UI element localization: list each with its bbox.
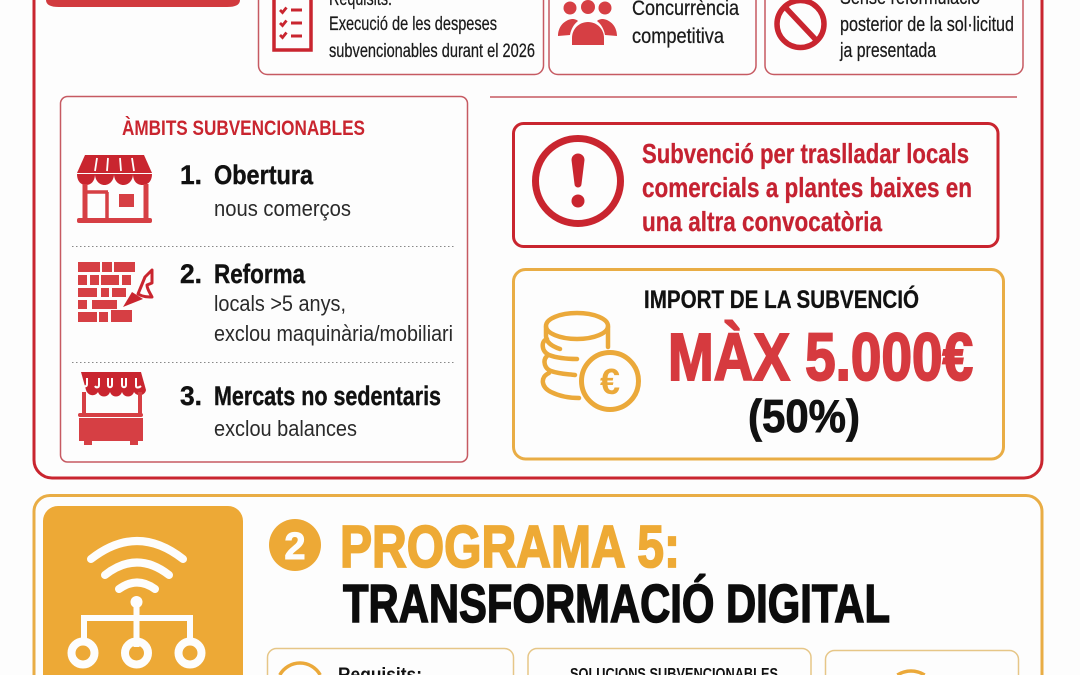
warning text: Subvenció per traslladar locals [642,138,969,169]
panel: third digital card [826,650,1018,675]
icon: euro coins [543,313,638,410]
item 3: non-sedentary markets: 3. [180,381,202,411]
item 2: renovation: Reforma [214,259,306,289]
panel: no reformulation card [765,0,1023,74]
icon: prohibited sign [777,0,824,48]
icon: shop [77,155,152,223]
item 2: renovation: locals >5 anys, [214,291,346,316]
competitive tender text [632,0,739,48]
item 3: non-sedentary markets [180,381,441,441]
panel: eligible solutions card [528,648,811,675]
item 3: non-sedentary markets: Mercats no sedentaris [214,381,441,411]
no reformulation text: ja presentada [839,40,937,62]
icon: market stall [78,372,146,445]
panel: digital requirements card [268,648,514,675]
icon: people group [558,0,617,45]
item 1: opening: 1. [180,160,202,190]
programme 2 number badge [269,519,321,571]
panel: competitive tender card [549,0,756,74]
item 2: renovation [180,259,453,346]
item 1: opening [180,160,351,221]
item 1: opening: Obertura [214,160,314,190]
item 1: opening: nous comerços [214,196,351,221]
panel: grant amount [514,270,1004,459]
icon: exclamation mark [536,138,620,224]
warning text [642,138,972,237]
competitive tender text: competitiva [632,25,724,48]
panel: programme 2 outer frame [34,496,1042,675]
item 2: renovation: exclou maquinària/mobiliari [214,321,453,346]
requirement text: Execució de les despeses [329,14,497,35]
item 3: non-sedentary markets: exclou balances [214,416,357,441]
panel: requirement card [258,0,544,74]
heading: eligible areas: ÀMBITS SUBVENCIONABLES [122,117,365,140]
callout: relocation warning [514,124,998,246]
amount heading: IMPORT DE LA SUBVENCIÓ [644,284,919,314]
icon: requirement circle [280,663,320,675]
euro glyph on coin: € [600,361,620,402]
panel: programme 1 outer frame [34,0,1042,478]
warning text: comercials a plantes baixes en [642,172,972,203]
requirement text: subvencionables durant el 2026 [329,41,535,62]
warning text: una altra convocatòria [642,206,882,237]
heading: digital transformation: TRANSFORMACIÓ DIGITAL [343,574,890,634]
item 2: renovation: 2. [180,259,202,289]
requirement text [329,0,535,62]
icon: third card circle [897,671,925,675]
amount value: MÀX 5.000€ [668,320,973,395]
programme 1 header block [46,0,240,7]
no reformulation text [839,0,1014,62]
icon: wifi network on orange tile [43,506,243,675]
panel: eligible areas [60,96,468,462]
no reformulation text: posterior de la sol·licitud [840,14,1014,36]
icon: brick wall and trowel [78,262,152,322]
heading: programme 5: PROGRAMA 5: [340,514,680,580]
programme 2 number badge: 2 [284,526,306,568]
icon: checklist [274,0,311,50]
amount percentage: (50%) [748,390,860,442]
